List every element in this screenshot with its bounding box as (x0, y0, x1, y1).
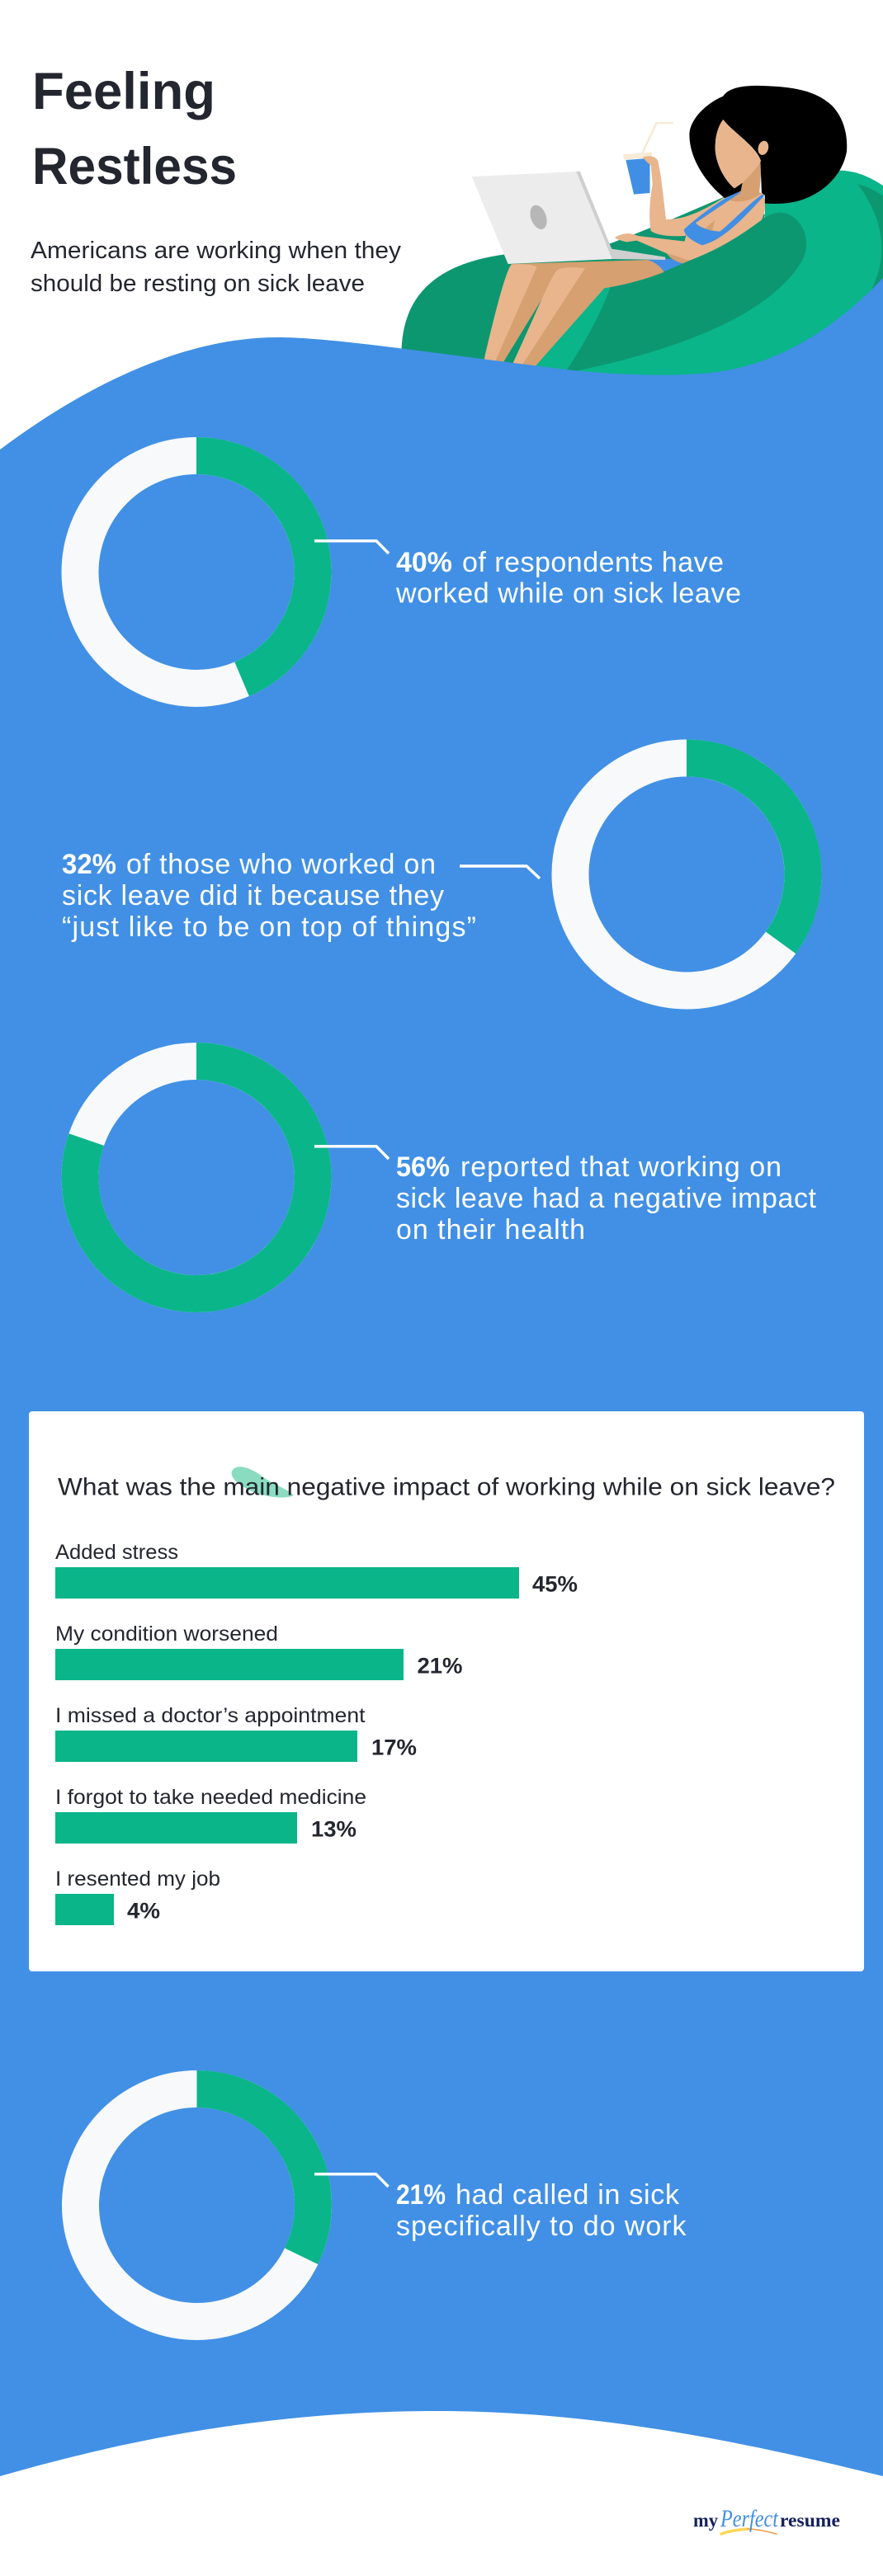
row: forgot medicine: I forgot to take needed medicine (55, 1786, 366, 1809)
logo swoosh (721, 2529, 777, 2534)
title: Restless (32, 138, 237, 195)
beanbag front fold (564, 213, 806, 374)
stat text: sick leave had a negative impact (396, 1183, 817, 1214)
torso and lower arm (615, 193, 765, 261)
neck (725, 159, 762, 201)
stat text: 40% (396, 547, 452, 578)
stat text: had called in sick (456, 2179, 680, 2211)
subtitle: Americans are working when they (31, 238, 402, 264)
face (715, 120, 761, 188)
row: missed appointment (55, 1704, 417, 1762)
stat text: 32% (62, 849, 116, 880)
leader line (314, 2174, 389, 2187)
stat text: reported that working on (460, 1151, 781, 1183)
row: forgot medicine (55, 1786, 366, 1844)
leader line (314, 541, 389, 553)
decorative brush mark (232, 1467, 294, 1497)
row: resented job: 4% (127, 1899, 160, 1924)
title (32, 63, 237, 195)
logo wordmark (693, 2505, 840, 2532)
ear (757, 140, 770, 156)
panel background (29, 1411, 864, 1971)
leg highlight left (484, 264, 537, 361)
leg highlight right (512, 267, 585, 365)
stat text (395, 547, 741, 609)
row: forgot medicine: 13% (311, 1816, 357, 1841)
row: condition worsened: 21% (418, 1653, 462, 1678)
stat text (396, 1151, 817, 1246)
stat text: 21% (396, 2179, 446, 2211)
logo wordmark: my (693, 2510, 718, 2531)
row: resented job: I resented my job (55, 1867, 220, 1891)
chart question heading: What was the main negative impact of working while on sick leave? (58, 1473, 835, 1501)
donut chart 32% (570, 758, 803, 991)
stat text: sick leave did it because they (62, 880, 444, 911)
row: added stress: 45% (532, 1572, 578, 1597)
hair (689, 86, 847, 204)
stat 21% (81, 2089, 687, 2321)
raised arm (643, 156, 733, 236)
stat text: on their health (396, 1214, 585, 1246)
stat text (396, 2179, 687, 2242)
stat 40% (80, 455, 741, 688)
laptop lid (472, 172, 612, 264)
row: missed appointment: I missed a doctor’s appointment (55, 1704, 366, 1727)
stat text: of those who worked on (126, 849, 436, 880)
subtitle: should be resting on sick leave (31, 271, 365, 297)
beanbag back (401, 196, 765, 396)
row: added stress (55, 1541, 578, 1599)
stat text: specifically to do work (396, 2211, 687, 2242)
stat text: worked while on sick leave (395, 577, 741, 609)
stat 32% (62, 758, 803, 991)
row: missed appointment: 17% (371, 1735, 417, 1760)
laptop logo (527, 204, 550, 231)
bikini top (684, 192, 764, 245)
drink cup (626, 158, 650, 195)
waist shadow (667, 253, 689, 263)
row: condition worsened: My condition worsened (55, 1622, 278, 1646)
logo: myPerfectResume (693, 2505, 840, 2534)
title: Feeling (32, 63, 215, 120)
cleavage shadow (706, 220, 715, 231)
stat text: of respondents have (462, 547, 724, 578)
logo wordmark: Perfect (720, 2505, 779, 2532)
laptop edge (576, 172, 614, 259)
stat text: “just like to be on top of things” (62, 911, 476, 943)
drink straw (642, 123, 673, 153)
leader line (460, 866, 540, 878)
laptop base (611, 249, 665, 260)
stat 56% (80, 1061, 817, 1293)
donut chart 56% (80, 1061, 313, 1293)
stat text (62, 849, 476, 943)
beanbag main (508, 171, 883, 396)
logo wordmark: resume (780, 2510, 840, 2531)
stat text: 56% (396, 1151, 450, 1183)
drink lid (623, 152, 652, 160)
far leg and thigh (495, 260, 663, 366)
row: added stress: Added stress (55, 1541, 178, 1564)
leader line (314, 1147, 389, 1159)
row: resented job (55, 1867, 220, 1925)
donut chart 40% (80, 455, 313, 688)
beanbag right shade (858, 184, 883, 294)
illustration: woman with laptop on beanbag (401, 86, 883, 396)
panel: main negative impact bar chart (29, 1411, 864, 1971)
donut chart 21% (81, 2089, 314, 2321)
bikini bottom (648, 258, 683, 271)
row: condition worsened (55, 1622, 462, 1680)
subtitle (31, 238, 402, 297)
